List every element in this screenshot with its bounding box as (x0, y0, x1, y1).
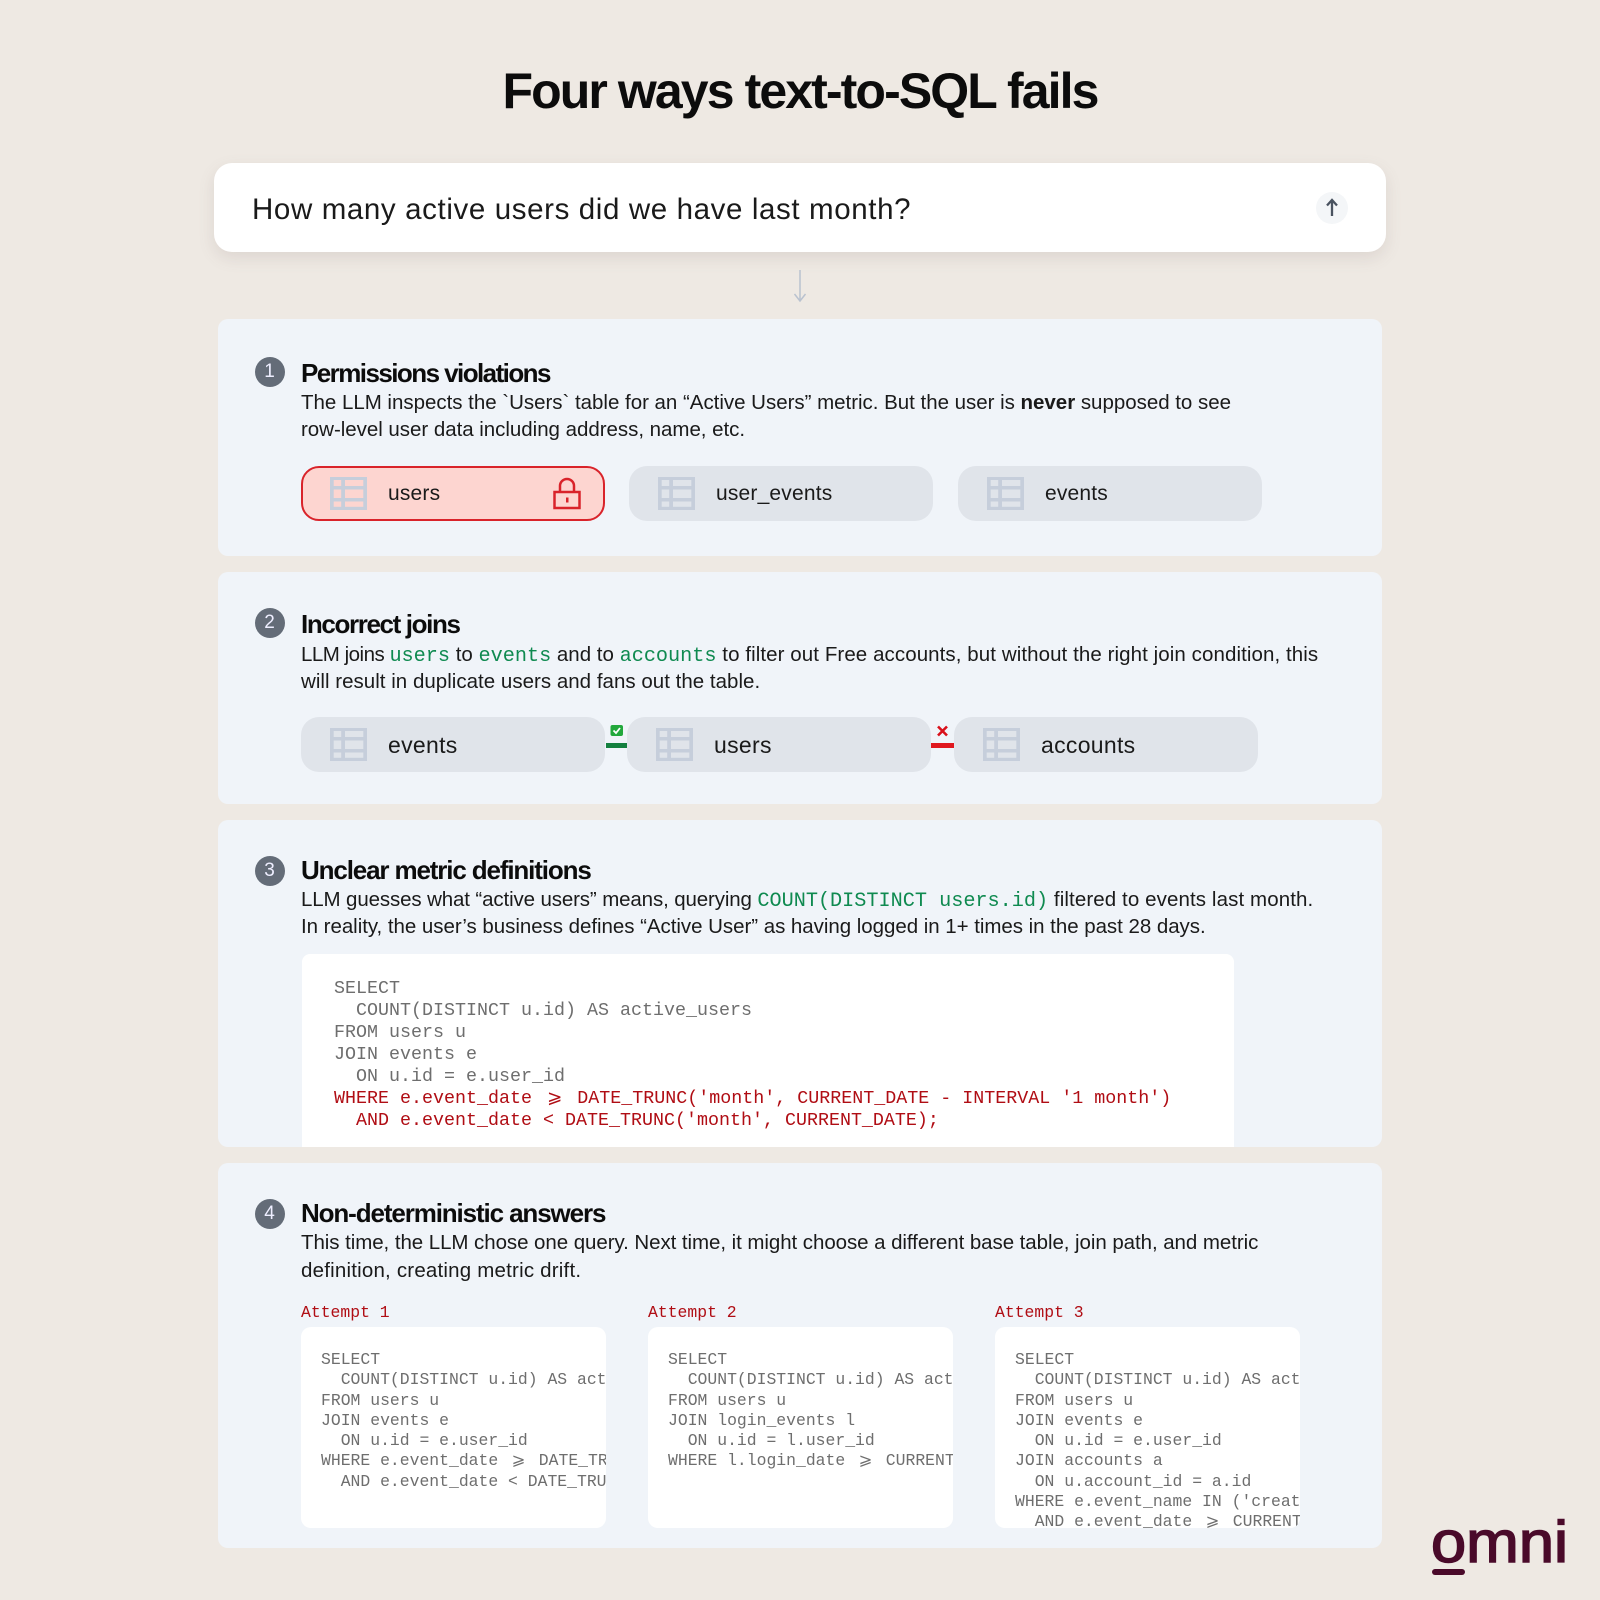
icon: lock (553, 478, 581, 510)
heading: Unclear metric definitions (301, 855, 591, 885)
SQL code block: SELECT COUNT(DISTINCT u.id) AS active_users FROM users u JOIN events e ON u.id = e.user_id WHERE e.event_date DATE_TRUNC('month', CURRENT_DATE - INTERVAL '1 month') AND e.event_date < DATE_TRUNC('month', CURRENT_DATE); (334, 978, 1171, 1131)
icon: send arrow (1316, 192, 1348, 224)
step number 4: 4 (264, 1202, 275, 1224)
step number 1 (254, 356, 284, 386)
panel: unclear metric definitions (218, 820, 1382, 1147)
attempt 3 label: Attempt 3 (995, 1303, 1084, 1322)
description (301, 1231, 1258, 1282)
attempt 2 code: ⩾ (859, 1450, 872, 1469)
table pill: events (958, 466, 1262, 521)
step number 2: 2 (264, 612, 275, 632)
description: definition, creating metric drift. (301, 1259, 581, 1282)
table pill: accounts (954, 717, 1258, 772)
omni logo: omni (1431, 1510, 1568, 1575)
description (301, 391, 1231, 441)
heading: Non-deterministic answers (301, 1198, 605, 1228)
description: In reality, the user’s business defines “Active User” as having logged in 1+ times in the past 28 days. (301, 915, 1206, 938)
description: will result in duplicate users and fans out the table. (301, 670, 760, 693)
description: LLM joins users to events and to accounts to filter out Free accounts, but without the right join condition, this (301, 643, 1318, 668)
description (301, 643, 1318, 693)
panel: non-deterministic answers (218, 1163, 1382, 1548)
table pill: user_events (629, 466, 933, 521)
table pill: events: events (1045, 482, 1108, 505)
step number 1: 1 (264, 360, 275, 382)
invalid join connector (931, 726, 954, 748)
panel: permissions violations (218, 319, 1382, 556)
step number 3 (254, 856, 284, 886)
table pill: user_events: user_events (716, 482, 832, 505)
heading: Incorrect joins (301, 609, 460, 639)
table pill: accounts: accounts (1041, 732, 1135, 758)
table pill: users: users (714, 732, 772, 758)
prompt input box (214, 163, 1386, 252)
description: This time, the LLM chose one query. Next time, it might choose a different base table, join path, and metric (301, 1231, 1258, 1254)
description: LLM guesses what “active users” means, querying COUNT(DISTINCT users.id) filtered to events last month. (301, 888, 1313, 913)
step number 4 (254, 1198, 284, 1228)
SQL code block: ⩾ (547, 1087, 562, 1108)
description: The LLM inspects the `Users` table for an “Active Users” metric. But the user is never supposed to see (301, 391, 1231, 414)
prompt text: How many active users did we have last month? (252, 193, 911, 226)
description (301, 888, 1313, 938)
attempt 1 code: ⩾ (512, 1450, 525, 1469)
attempt 2 label: Attempt 2 (648, 1303, 737, 1322)
attempt 1 label: Attempt 1 (301, 1303, 390, 1322)
heading: Permissions violations (301, 358, 550, 388)
arrow: down to panels (794, 270, 806, 302)
attempt 2 code (648, 1327, 953, 1528)
table pill: users locked (301, 466, 605, 521)
table pill: events: events (388, 732, 458, 758)
panel: incorrect joins (218, 572, 1382, 804)
title: Four ways text-to-SQL fails (502, 63, 1098, 119)
description: row-level user data including address, name, etc. (301, 418, 745, 441)
attempt 1 code (301, 1327, 606, 1528)
table pill: events (301, 717, 605, 772)
step number 2 (254, 608, 284, 638)
table pill: users locked: users (388, 482, 440, 505)
SQL code block (302, 954, 1234, 1154)
valid join connector (606, 725, 627, 748)
table pill: users (627, 717, 931, 772)
step number 3: 3 (264, 860, 275, 880)
